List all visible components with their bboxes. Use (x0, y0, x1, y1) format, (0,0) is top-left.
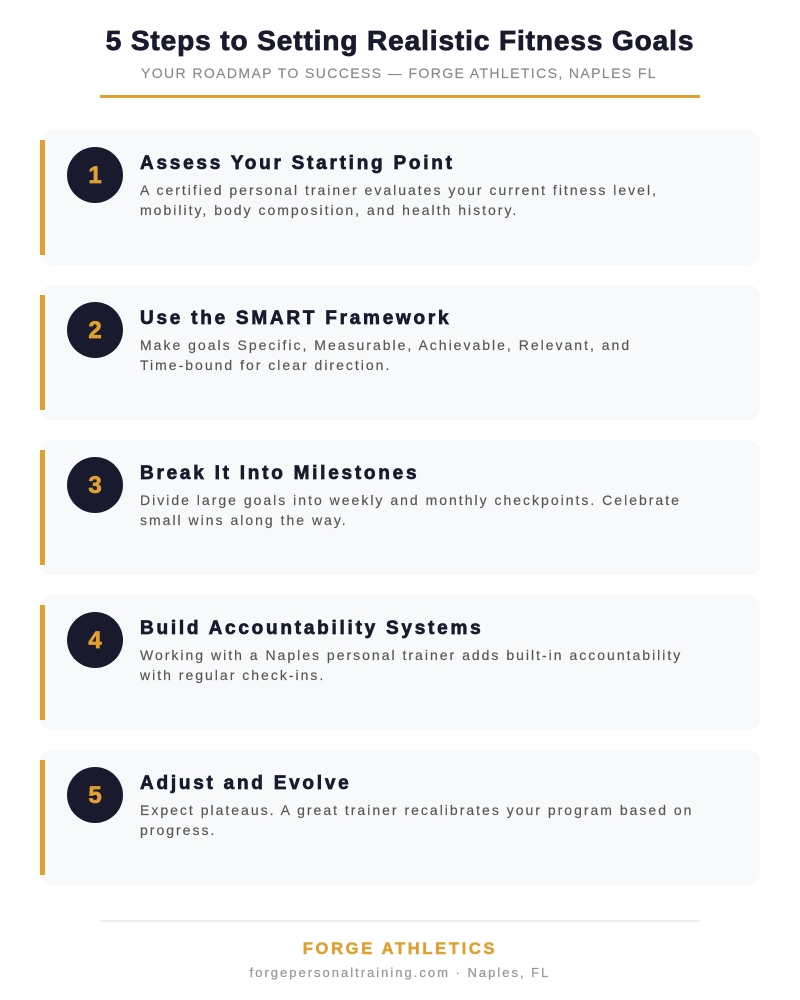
number badge: step 4 (67, 612, 123, 668)
number badge: step 3: 3 (88, 472, 102, 499)
panel: step 3 (40, 440, 760, 575)
title: 5 Steps to Setting Realistic Fitness Goals (106, 25, 694, 56)
description: step 4: Working with a Naples personal trainer adds built-in accountability (140, 647, 682, 663)
description: step 4: with regular check-ins. (140, 667, 325, 683)
number badge: step 3 (67, 457, 123, 513)
description: step 1 (140, 182, 658, 218)
description: step 1: A certified personal trainer evaluates your current fitness level, (140, 182, 658, 198)
number badge: step 1: 1 (88, 162, 102, 189)
description: step 3 (140, 492, 681, 528)
heading: step 3: Break It Into Milestones (140, 463, 419, 484)
panel: step 5 (40, 750, 760, 885)
accent bar: step 2 (40, 295, 45, 410)
description: step 2 (140, 337, 631, 373)
description: step 2: Make goals Specific, Measurable, Achievable, Relevant, and (140, 337, 631, 353)
heading: step 4: Build Accountability Systems (140, 618, 483, 639)
header accent rule (100, 95, 700, 98)
heading: step 5: Adjust and Evolve (140, 773, 351, 794)
number badge: step 2 (67, 302, 123, 358)
description: step 5: Expect plateaus. A great trainer recalibrates your program based on (140, 802, 693, 818)
panel: step 1 (40, 130, 760, 265)
description: step 2: Time-bound for clear direction. (140, 357, 391, 373)
number badge: step 2: 2 (88, 317, 102, 344)
panel: step 2 (40, 285, 760, 420)
description: step 5: progress. (140, 822, 216, 838)
footer contact: forgepersonaltraining.com · Naples, FL (250, 965, 550, 980)
number badge: step 5: 5 (88, 782, 102, 809)
accent bar: step 4 (40, 605, 45, 720)
description: step 5 (140, 802, 693, 838)
description: step 3: Divide large goals into weekly and monthly checkpoints. Celebrate (140, 492, 681, 508)
description: step 1: mobility, body composition, and health history. (140, 202, 518, 218)
panel: step 4 (40, 595, 760, 730)
accent bar: step 1 (40, 140, 45, 255)
description: step 4 (140, 647, 682, 684)
footer divider (100, 920, 700, 922)
accent bar: step 5 (40, 760, 45, 875)
accent bar: step 3 (40, 450, 45, 565)
description: step 3: small wins along the way. (140, 512, 348, 528)
footer brand: FORGE ATHLETICS (303, 940, 497, 958)
number badge: step 4: 4 (88, 627, 102, 654)
heading: step 1: Assess Your Starting Point (140, 153, 455, 174)
subtitle: YOUR ROADMAP TO SUCCESS — FORGE ATHLETICS, NAPLES FL (141, 65, 657, 81)
heading: step 2: Use the SMART Framework (140, 308, 451, 329)
number badge: step 5 (67, 767, 123, 823)
number badge: step 1 (67, 147, 123, 203)
